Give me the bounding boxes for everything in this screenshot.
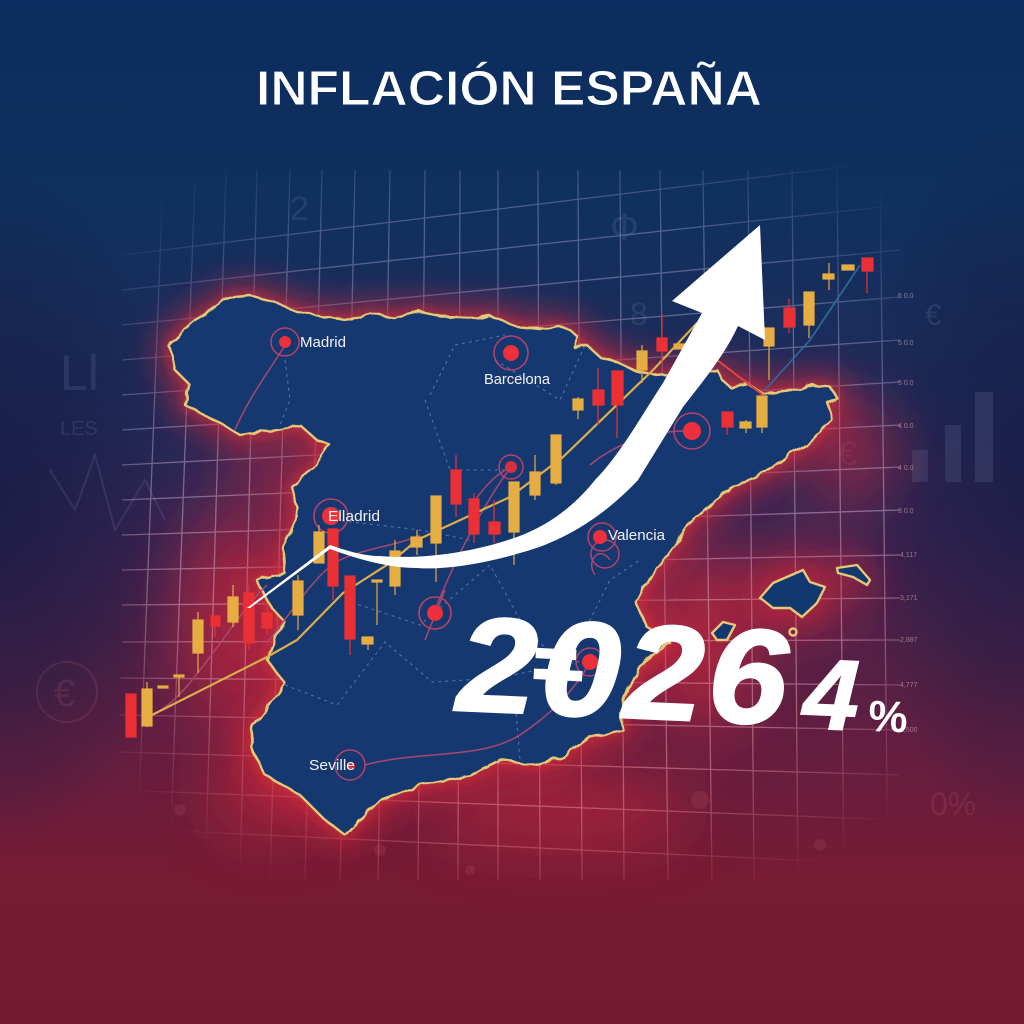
marker: Elladrid: Elladrid (328, 508, 380, 525)
faint background financial motifs: Ll (60, 345, 99, 401)
candlesticks: gold (142, 263, 854, 727)
inner hot rim (168, 295, 837, 835)
year 2026: 2026 (452, 590, 792, 754)
faint background financial motifs (37, 190, 993, 822)
perspective grid (116, 160, 900, 880)
right axis labels: 4,777 (900, 682, 918, 689)
right axis labels: 3 0.0 (898, 508, 914, 515)
right axis labels: 1,500 (900, 727, 918, 734)
faint background financial motifs: 8 (630, 296, 648, 332)
marker: Elladrid (314, 499, 380, 533)
marker: Madrid: Madrid (300, 335, 346, 351)
value 4 percent (799, 638, 908, 752)
faint background financial motifs: € (54, 673, 75, 715)
marker: Valencia (588, 523, 666, 568)
right axis labels: 4 0.0 (898, 423, 914, 430)
marker: Valencia: Valencia (608, 528, 666, 544)
faint background financial motifs: 0% (930, 786, 976, 822)
right axis labels: 4 0.0 (898, 465, 914, 472)
faint background financial motifs: € (838, 435, 857, 473)
map of Spain (168, 295, 837, 835)
bottom glow dots (174, 791, 826, 875)
trend lines (150, 265, 860, 716)
value 4 percent: % (868, 692, 908, 742)
faint background financial motifs: € (925, 299, 942, 332)
right axis labels: 3,171 (900, 595, 918, 602)
rising white arrow (247, 225, 765, 608)
marker: Barcelona: Barcelona (484, 372, 551, 388)
marker: south east behind year (576, 648, 604, 676)
city connection curves (150, 345, 690, 765)
marker: Madrid (271, 328, 346, 356)
right axis labels: 5 0.0 (898, 340, 914, 347)
right axis labels (898, 293, 918, 734)
islands (712, 565, 870, 640)
faint background financial motifs: LES (60, 418, 98, 440)
title: INFLACIÓN ESPAÑA (256, 61, 762, 116)
marker: south centre (419, 597, 451, 629)
marker: centre (499, 455, 523, 479)
marker: Seville (309, 750, 365, 780)
right axis labels: 6 0.0 (898, 293, 914, 300)
red glow patches around the map (180, 400, 890, 840)
faint background financial motifs: Ф (610, 207, 639, 249)
right axis labels: 5 0.0 (898, 380, 914, 387)
marker: Barcelona (484, 336, 551, 388)
right axis labels: 4,117 (900, 552, 917, 559)
faint background financial motifs: 2 (290, 190, 309, 228)
marker: north east (674, 413, 710, 449)
right axis labels: 2,887 (900, 637, 918, 644)
marker: Seville: Seville (309, 758, 355, 774)
candlesticks: red (126, 258, 873, 737)
value 4 percent: 4 (799, 638, 861, 752)
region borders (dashed) (280, 335, 640, 760)
red glow around the map (168, 295, 870, 835)
